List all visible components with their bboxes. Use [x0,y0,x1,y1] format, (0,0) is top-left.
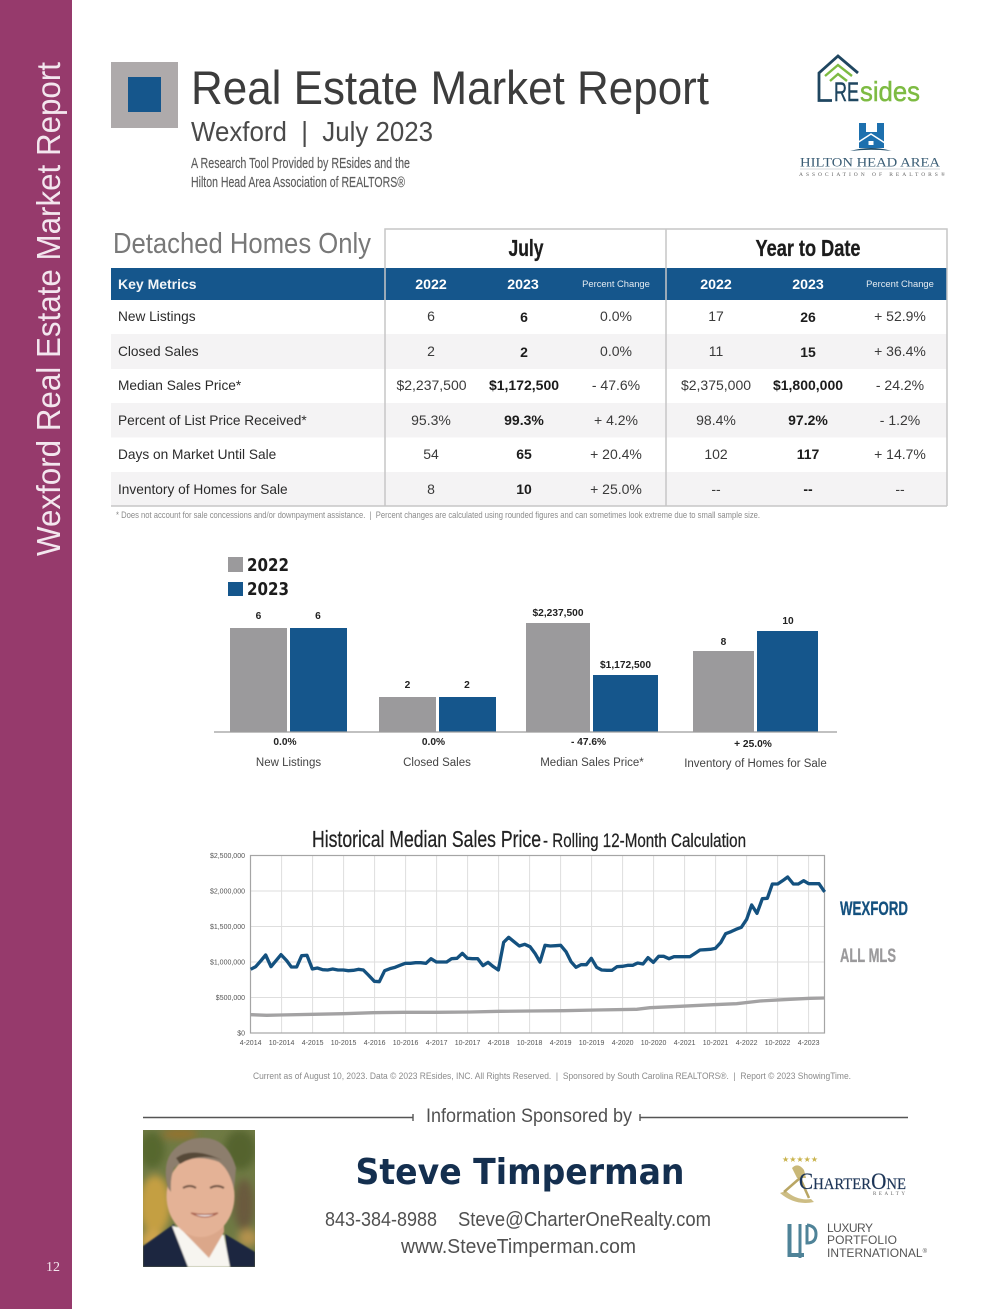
x axis labels: 4-2023 [798,1040,820,1047]
title: Real Estate Market Report [191,61,709,114]
x axis labels: 10-2018 [517,1040,543,1047]
row: new listings: 17 [708,308,724,324]
line: Wexford [251,877,825,982]
panel: line chart [210,853,825,1047]
row: inventory: -- [803,481,813,497]
panel: sidebar [0,0,72,1309]
x axis labels: 4-2021 [674,1040,696,1047]
row: inventory: Inventory of Homes for Sale [118,482,288,497]
panel: bar chart [214,555,837,770]
x axis labels: 10-2017 [455,1040,481,1047]
intro text [191,155,410,191]
table heading: Detached Homes Only [113,228,371,260]
bars: new listings: 0.0% [273,737,297,748]
logo: Hilton Head Area: ASSOCIATION OF REALTORS® [799,171,945,178]
row: days on market: Days on Market Until Sale [118,447,276,462]
photo: sponsor portrait [139,1129,258,1267]
subtitle: Wexford | July 2023 [191,116,433,147]
footnote: * Does not account for sale concessions and/or downpayment assistance. | Percent changes are calculated using rounded figures and can sometimes look extreme due to small sample size. [116,510,760,521]
data credit: Current as of August 10, 2023. Data © 2023 REsides, INC. All Rights Reserved. | Sponsored by South Carolina REALTORS®. | Report © 2023 ShowingTime. [253,1071,851,1082]
legend [228,555,289,600]
row: percent of list price: - 1.2% [880,412,920,428]
x axis labels: 10-2019 [579,1040,605,1047]
bars: closed sales [379,680,496,769]
x axis labels: 4-2017 [426,1040,448,1047]
x axis labels: 10-2020 [641,1040,667,1047]
logo: CharterOne [780,1155,906,1203]
logo: Luxury Portfolio: INTERNATIONAL [827,1246,923,1260]
header band: 2022 [415,277,447,293]
row: closed sales: Closed Sales [118,344,199,359]
x axis labels: 10-2022 [765,1040,791,1047]
sponsor heading: Information Sponsored by [426,1106,632,1127]
period header boxes: Year to Date [756,235,860,261]
row: new listings [118,308,926,325]
row: closed sales: 15 [800,344,816,360]
x axis labels: 4-2018 [488,1040,510,1047]
y axis labels: $2,000,000 [210,888,245,896]
intro text: Hilton Head Area Association of REALTORS® [191,174,405,191]
bars: inventory: 8 [721,637,727,648]
bars: closed sales: 0.0% [422,737,445,748]
legend: 2022 [247,555,289,576]
header band: 2022 [700,277,732,293]
logo: Luxury Portfolio: PORTFOLIO [827,1233,897,1247]
row shading [111,334,947,506]
x axis labels [240,1040,820,1047]
row: inventory: -- [711,481,721,497]
series label: Wexford: WEXFORD [840,899,908,920]
x axis labels: 10-2015 [331,1040,357,1047]
row: percent of list price: 97.2% [788,412,828,428]
row: median sales price: - 24.2% [876,377,924,393]
logo: CharterOne: REALTY [873,1192,905,1197]
row: percent of list price: 98.4% [696,412,736,428]
bars: closed sales: 2 [464,680,470,691]
logo: Luxury Portfolio: ® [923,1248,928,1255]
row: percent of list price [118,412,920,428]
series label: All MLS: ALL MLS [840,946,896,967]
logo: Hilton Head Area [799,123,945,178]
logo: REsides [819,56,920,107]
bars: median sales price [526,608,658,769]
bars: new listings: 6 [315,611,321,622]
row: median sales price: $2,237,500 [396,377,467,393]
panel: metrics table [111,228,947,506]
bars: closed sales: 2 [405,680,411,691]
row: new listings: 0.0% [600,308,632,324]
row: closed sales: 2 [427,343,435,359]
header band: Key Metrics [118,276,197,292]
row: percent of list price: Percent of List Price Received* [118,413,307,428]
header band [111,268,947,300]
row: days on market: + 20.4% [590,446,642,462]
row: percent of list price: 95.3% [411,412,451,428]
bars: median sales price: - 47.6% [571,737,606,748]
row: closed sales: 2 [520,344,528,360]
row: inventory: -- [895,481,905,497]
y axis labels: $1,000,000 [210,960,245,966]
period header boxes [385,229,947,269]
row: closed sales: 11 [709,343,723,359]
row: inventory: 10 [516,481,532,497]
logo: REsides: RE [834,77,859,107]
y axis labels: $0 [237,1030,245,1038]
row: closed sales: 0.0% [600,343,632,359]
sponsor name: Steve Timperman [356,1152,684,1193]
line: all MLS [251,998,825,1015]
header band: Percent Change [866,278,934,289]
period header boxes: July [508,235,544,261]
logo: Luxury Portfolio: LUXURY [827,1221,873,1235]
bars: median sales price: $1,172,500 [600,660,651,671]
row: new listings: New Listings [118,309,196,324]
legend: 2023 [247,579,289,600]
y axis labels: $500,000 [216,995,245,1002]
logo: Luxury Portfolio [790,1221,928,1260]
row: inventory [118,481,905,497]
chart title [312,826,746,852]
sponsor heading [143,1106,908,1127]
bars: median sales price: $2,237,500 [532,608,584,619]
logo: Hilton Head Area: HILTON HEAD AREA [800,154,941,170]
chart title: - Rolling 12-Month Calculation [543,831,746,852]
header band: 2023 [507,277,539,293]
row: inventory: 8 [427,481,435,497]
row: inventory: + 25.0% [590,481,642,497]
intro text: A Research Tool Provided by REsides and the [191,155,410,172]
x axis labels: 10-2021 [703,1040,729,1047]
bars: closed sales: Closed Sales [403,757,471,769]
x axis labels: 4-2019 [550,1040,572,1047]
logo: CharterOne: CHARTERONE [799,1169,906,1194]
chart title: Historical Median Sales Price [312,826,541,852]
bars: inventory: 10 [782,616,794,627]
sponsor website: www.SteveTimperman.com [400,1236,636,1258]
x axis labels: 4-2020 [612,1040,634,1047]
x axis labels: 10-2016 [393,1040,419,1047]
y axis labels: $1,500,000 [210,924,245,931]
bars: new listings: New Listings [256,757,321,769]
logo: REsides: sides [860,76,920,107]
bars: median sales price: Median Sales Price* [540,757,644,769]
row: days on market: + 14.7% [874,446,926,462]
x axis labels: 4-2016 [364,1040,386,1047]
row: days on market [118,446,926,462]
x axis labels: 4-2022 [736,1040,758,1047]
sidebar title: Wexford Real Estate Market Report [30,62,67,556]
icon: report square [111,62,178,128]
sponsor phone: 843-384-8988 [325,1209,437,1231]
row: median sales price: $1,172,500 [489,377,559,393]
x axis labels: 4-2015 [302,1040,324,1047]
row: percent of list price: 99.3% [504,412,544,428]
row: median sales price [118,377,924,393]
bars: inventory: + 25.0% [734,739,772,750]
row: median sales price: - 47.6% [592,377,640,393]
bars: inventory: Inventory of Homes for Sale [684,758,827,770]
row: median sales price: Median Sales Price* [118,378,242,393]
row: days on market: 65 [516,446,532,462]
row: median sales price: $1,800,000 [773,377,843,393]
y axis labels: $2,500,000 [210,853,245,860]
row: new listings: 26 [800,309,816,325]
row: new listings: 6 [520,309,528,325]
bars: inventory [684,616,827,770]
header band: 2023 [792,277,824,293]
sponsor email: Steve@CharterOneRealty.com [458,1209,711,1231]
bars: new listings [230,611,347,769]
row: days on market: 54 [423,446,439,462]
header band: Percent Change [582,278,650,289]
x axis labels: 10-2014 [269,1040,295,1047]
row: closed sales: + 36.4% [874,343,926,359]
row: median sales price: $2,375,000 [681,377,751,393]
logo: CharterOne: ★★★★★ [782,1155,818,1164]
row: days on market: 102 [704,446,728,462]
y axis labels [210,853,245,1038]
row: days on market: 117 [797,446,820,462]
row: closed sales [118,343,926,360]
row: new listings: 6 [427,308,435,324]
row: percent of list price: + 4.2% [594,412,638,428]
x axis labels: 4-2014 [240,1040,262,1047]
page number: 12 [46,1260,60,1275]
bars: new listings: 6 [256,611,262,622]
row: new listings: + 52.9% [874,308,926,324]
